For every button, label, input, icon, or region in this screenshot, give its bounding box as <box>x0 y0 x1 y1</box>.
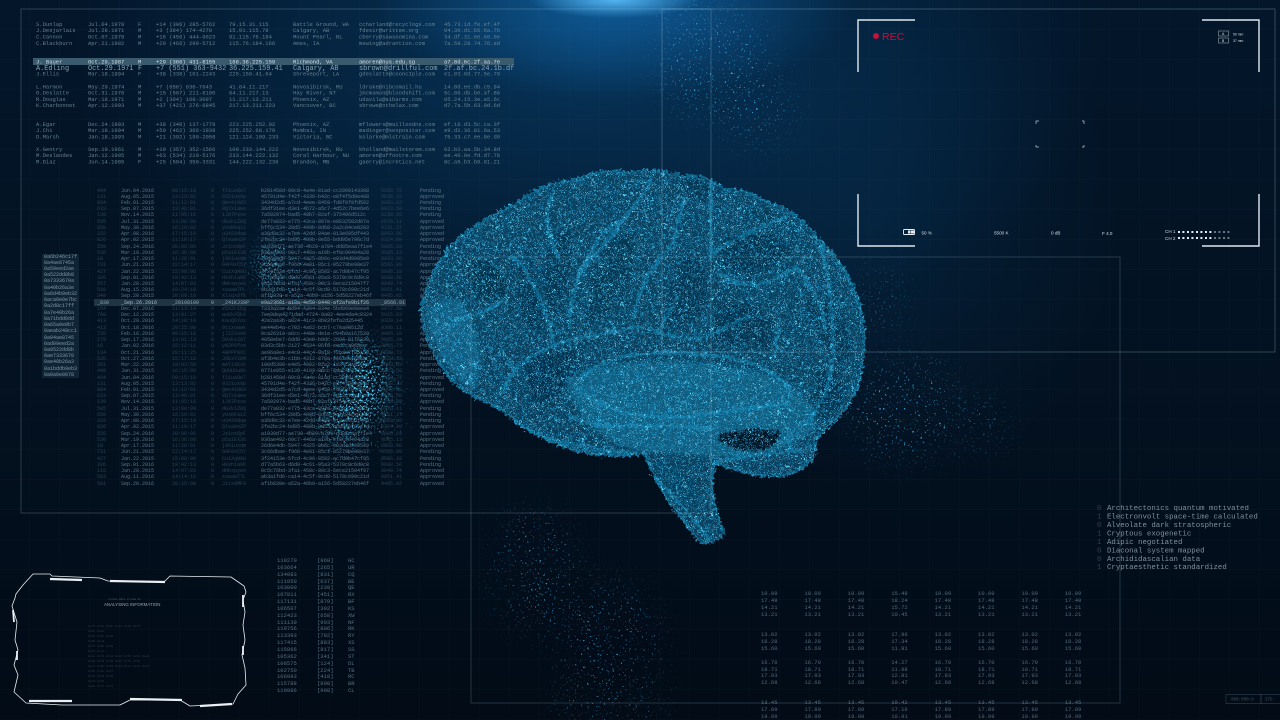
personnel data table: 223.225.252.02 <box>229 121 275 128</box>
numeric data grid: 10.09 10.09 10.09 15.48 10.09 10.09 10.09 10.09 <box>761 590 1081 597</box>
personnel data table: M.Deslandes <box>36 152 72 159</box>
personnel data table: 233.144.222.132 <box>229 152 279 159</box>
personnel data table: 2f.af.bc.24.1b.df <box>444 65 514 73</box>
viewfinder corners <box>858 20 1259 246</box>
personnel data table: M <box>138 27 141 34</box>
personnel data table: Mar.18.1971 <box>88 96 125 103</box>
numeric data grid: 13.02 13.02 13.02 17.96 13.02 13.02 13.02 13.02 <box>761 631 1081 638</box>
frame: lower panel <box>471 257 1120 703</box>
HUD faint data: 0x76 0xd0 0x25 <box>88 674 113 678</box>
personnel data table: Vancouver, BC <box>293 102 337 109</box>
personnel data table: 217.13.211.223 <box>229 102 275 109</box>
HUD small caption: system data stream 01 <box>108 597 141 601</box>
HUD faint data: 0xa7 0x5b 0x30 0x84 0xce 0x61 0x2f <box>88 664 149 668</box>
status list: Cryptaesthetic standardized <box>1107 564 1227 572</box>
dark cerebellum gap <box>717 429 780 451</box>
transaction table: index column: 494 131 884 633 139 505 858 332 826 550 530 18 731 427 326 557 510 349 _830 154 760 413 413 735 275 16 134 535 391 499 494 131 884 633 139 505 858 332 826 550 530 18 731 427 326 116 583 501 <box>97 188 109 487</box>
status list: 0 <box>1097 522 1101 530</box>
personnel data table: +7 (551) 363-9432 <box>156 65 226 73</box>
personnel data table: Sep.19.1961 <box>88 146 125 153</box>
personnel data table: +14 (396) 285-5762 <box>156 21 215 28</box>
personnel data table: O.Deslatte <box>36 90 69 97</box>
lens readout: B <box>1222 39 1225 43</box>
personnel data table: L.Harmon <box>36 84 62 91</box>
personnel data table: 7a.59.29.74.76.ad <box>444 40 500 47</box>
transaction table: uuid column: b281458d-00c8-4a4e-81ad-cc2060143308 45791d4e-f42f-4336-b42c-e8f4f5d9e408 3434d2d5-a7cd-4eee-8459-fd8f8f8fd502 36df31ee-d3e1-4b72-a5c7-4d52c7bee6e6 7a592974-bad5-48b7-82af-375406d512c de77a032-e775-43ca-897e-e8632502d07a bff6c534-28d5-499b-8d68-2a2c84ce8203 a36d0c32-e7ee-42dd-84ae-013e695df443 2fe2bc24-bd05-409b-8e55-bdd95e796c7d a1039d77-ae730-4b29-a784-dd85eaa7f1e4 936ae492-60c7-446a-a19b-ef8c90404a28 26d6e4db-5947-4325-8b6c-e03d4d9985e0 3c66dbae-f966-4e81-85c1-05279be98e37 3f24153e-5fcd-4c96-8502-ac7d0b47cf95 d77a5b63-d6d0-4c61-95a3-5370c9c6d0c8 0c5c76bd-3fa1-458c-80c3-6ece215047f7 ab3a1fd6-ca14-4c5f-9cd0-5178c699c21d af1b839-e-a52a-46b9-a156-5d58227eb46f e9a23681-a13a-4e50-8448-af2afe9b1f26 7333a2ae-8d94-4304-834e-5bd969e0eea4 7ee9dea42-1dad-4724-9a82-4ee4da4c8324 42e2aa3b-a824-41c3-8b83fefa2d25445 ee44eb4a-c702-4a62-bcb7-c7ea98512d 9ca26310-a6cc-448e-de1e-c94b9a167528 4058ebe7-6dd9-43e0-b0dc-2684-0176339 83d3c5bb-2127-4534-86f6-eed2ca965ee ae96a8e1-e4c8-44c4-9a18-f2bae7f85153 af3b4e3b-c1bb-4312-878a-9e61ee1c06a 100d5390-e4e5-4002-82a2-1e34c3a055ea 0771e055-e139-4103-86cc-8da2422f29 b281458d-00c8-4a4e-81ad-cc2060143308 45791d4e-f42f-4336-b42c-e8f4f5d9e408 3434d2d5-a7cd-4eee-8459-fd8f8f8fd502 36df31ee-d3e1-4b72-a5c7-4d52c7bee6e6 7a592974-bad5-48b7-82af-375406d512c de77a032-e775-43ca-897e-e8632502d07a bff6c534-28d5-499b-8d68-2a2c84ce8203 a36d0c32-e7ee-42dd-84ae-013e695df443 2fe2bc24-bd05-409b-8e55-bdd95e796c7d a1039d77-ae730-4b29-a784-dd85eaa7f1e4 936ae492-60c7-446a-a19b-ef8c90404a28 26d6e4db-5947-4325-8b6c-e03d4d9985e0 3c66dbae-f966-4e81-85c1-05279be98e37 3f24153e-5fcd-4c96-8502-ac7d0b47cf95 d77a5b63-d6d0-4c61-95a3-5370c9c6d0c8 0c5c76bd-3fa1-458c-80c3-6ece21504f97 ab3a1fd6-ca14-4c5f-9cd0-5178c699c21d af1b839e-a52a-46b9-a156-5d58227eb46f <box>261 188 372 487</box>
status list: Diaconal system mapped <box>1107 548 1205 556</box>
personnel data table: M <box>138 127 141 134</box>
personnel data table: +16 (456) 444-9623 <box>156 34 215 41</box>
personnel data table: kholland@mailstorem.com <box>359 146 436 153</box>
personnel data table: ldrake@nibcomail.hu <box>359 84 422 91</box>
personnel data table: Jan.18.1993 <box>88 134 124 141</box>
personnel data table: 36.225.159.41 <box>229 65 283 73</box>
highlight bar: transactions table <box>94 299 406 306</box>
personnel data table: kolarke@mlstrain.com <box>359 134 426 141</box>
transaction table: amount column: 9590.72 9638.33 9993.82 8923.50 6230.95 6976.11 9251.37 8863.80 6324.80 9905.03 9685.13 8893.00 8566.89 8886.18 8688.56 9849.74 9951.41 9495.02 _8566.91 8977.68 5915.83 8329.14 9306.11 9905.10 9905.34 9005.73 9590.72 9638.33 9993.82 8923.50 9590.72 9638.33 9993.82 8923.50 6230.95 6976.11 9251.37 8863.80 6324.80 9905.03 9685.13 8893.00 8566.89 8886.18 8688.56 9849.74 9951.41 9495.02 <box>381 188 405 487</box>
personnel data table: Shreveport, LA <box>293 71 340 78</box>
camera settings <box>922 229 1176 241</box>
lookup table: code column: GC UR CQ BE QE RX BF KS XW NF RK RY XS SS ST DL TB RC BR CL <box>348 557 355 694</box>
personnel data table: jmcmamon@bloodshift.com <box>359 90 436 97</box>
numeric data grid: 14.21 14.21 14.21 15.72 14.21 14.21 14.21 14.21 <box>761 604 1082 611</box>
HUD title: ANALYSING INFORMATION <box>104 602 160 607</box>
status list: Electronvolt space-time calculated <box>1107 514 1258 522</box>
HUD faint data: 0x90 0xa3 <box>88 640 104 643</box>
brain base volume <box>420 169 865 544</box>
personnel data table: F <box>138 71 141 78</box>
personnel data table: M <box>138 40 141 47</box>
personnel data table: Mar.18.1994 <box>88 127 125 134</box>
HUD faint data: 0x08 0xd4 0x39 0x6c 0xfa 0x12 <box>88 659 140 663</box>
personnel data table: M <box>138 134 141 141</box>
HUD faint data: 0x0a 0x6f 0xb1 <box>88 684 113 688</box>
hex code list: 0a6b246c17f 0a4ae8745a 0a59eed2ae 0a522dd8b8 0a7333670a 0a40b26a3e 0a6d4b0eb32 0aca0e0e7bc 0a2d8c17ff 0a7e40b26a 0a71bdd0dd 0a65a0e0b7 0aeab248cc1 0a94ae8745 0ad09eed2a 0a9522dd8b 0ae7333670 0ae40b26a3 0a1bddb0eb3 0a0a0e0078 <box>44 254 77 378</box>
personnel data table: 62.b2.aa.5b.34.8d <box>444 146 500 153</box>
personnel data table: 14.0d.ee.db.c5.94 <box>444 84 501 91</box>
personnel data table: Oct.29,1987 <box>88 59 124 66</box>
status list: 1 <box>1097 539 1102 547</box>
personnel data table: Novosibirsk, RU <box>293 84 343 91</box>
personnel data table: 144.222.132.236 <box>229 159 279 166</box>
personnel data table: 11.217.13.211 <box>229 96 273 103</box>
numeric data grid: 15.60 15.60 15.60 11.81 15.60 15.60 15.60 15.60 <box>761 645 1081 652</box>
camera settings: 50 % <box>922 230 932 236</box>
personnel data table: amoren@affootre.com <box>359 152 422 159</box>
personnel data table: a7.8d.6c.2f.aa.7e <box>444 59 500 66</box>
personnel data table: Apr.21.1982 <box>88 40 124 47</box>
personnel data table: 109.233.144.222 <box>229 146 279 153</box>
personnel data table: D.Marsh <box>36 134 59 141</box>
personnel data table: A.Egar <box>36 121 56 128</box>
personnel data table: R.Douglas <box>36 96 66 103</box>
lens readout: A <box>1222 32 1225 36</box>
personnel data table: Apr.12.1993 <box>88 102 124 109</box>
personnel data table: Phoenix, AZ <box>293 96 330 103</box>
personnel data table: ef.16.d3.5c.ca.3f <box>444 121 500 128</box>
status list: 0 <box>1097 505 1101 513</box>
personnel data table: M <box>138 34 141 41</box>
personnel data table: d7.7a.5b.63.0d.6d <box>444 102 500 109</box>
personnel data table: Hay River, NT <box>293 90 337 97</box>
brain and particle field <box>234 0 1032 720</box>
personnel data table: 05.24.15.3e.a5.6c <box>444 96 500 103</box>
numeric data grid: 17.93 17.93 17.93 12.81 17.93 17.93 17.93 17.93 <box>761 672 1081 679</box>
personnel data table: Mar.18.1994 <box>88 71 125 78</box>
personnel data table: Jul.28.1971 <box>88 27 125 34</box>
camera settings: CH 1 <box>1165 229 1176 234</box>
personnel data table: Jul.04.1978 <box>88 21 124 28</box>
lens readout <box>1218 31 1244 43</box>
numeric data grid: 13.21 13.21 13.21 10.45 13.21 13.21 13.21 13.21 <box>761 611 1082 618</box>
HUD faint data: 0x5d 0x0e 0x22 <box>88 634 113 638</box>
personnel data table: Ames, IA <box>293 40 320 47</box>
personnel data table: Coral Harbour, NU <box>293 152 349 159</box>
personnel data table: 64.11.217.13 <box>229 90 269 97</box>
camera settings: F 4.0 <box>1102 231 1113 236</box>
lens readout: 37 mm <box>1233 39 1244 43</box>
numeric data grid: 17.48 17.48 17.48 18.24 17.48 17.48 17.48 17.48 <box>761 597 1081 604</box>
personnel data table: Calgary, AB <box>293 65 338 73</box>
personnel data table: e1.03.0d.77.5e.79 <box>444 71 500 78</box>
personnel data table: C.Cannon <box>36 34 62 41</box>
record indicator: REC <box>882 31 905 43</box>
personnel data table: Jan.12.1995 <box>88 152 124 159</box>
bottom-right timecode box: STD <box>1265 698 1273 702</box>
personnel data table: 5c.86.db.be.af.86 <box>444 90 500 97</box>
status list: 1 <box>1097 530 1102 538</box>
personnel data table: 79.15.31.115 <box>229 21 269 28</box>
personnel data table: 91.115.76.184 <box>229 34 273 41</box>
personnel data table: mflowers@mailloodns.com <box>359 121 436 128</box>
lens readout: 50 mm <box>1233 32 1244 36</box>
personnel data table: 166.36.225.159 <box>229 59 275 66</box>
personnel data table: M.Diaz <box>36 159 56 166</box>
bottom-right timecode box: 000:000:9 <box>1231 698 1254 702</box>
battery icon <box>904 230 914 234</box>
personnel data table: M <box>138 96 141 103</box>
focus ticks <box>1036 121 1084 147</box>
personnel data table: J.Desjarlais <box>36 27 76 34</box>
HUD frame outline <box>12 574 246 706</box>
personnel data table: F <box>138 65 142 73</box>
personnel data table: +38 (338) 101-2243 <box>156 71 215 78</box>
personnel data table: 41.64.11.217 <box>229 84 269 91</box>
personnel data table: 34.df.31.ee.60.0e <box>444 34 500 41</box>
personnel data table: May.29.1974 <box>88 84 125 91</box>
status list: 0 <box>1097 556 1101 564</box>
personnel data table: Victoria, BC <box>293 134 333 141</box>
personnel data table: M <box>138 90 141 97</box>
personnel data table: 15.91.115.78 <box>229 27 269 34</box>
personnel data table: J. Bauer <box>36 59 62 66</box>
camera settings: CH 2 <box>1165 236 1176 241</box>
HUD faint data: 0x1b 0x9e 0x47 <box>88 669 113 673</box>
personnel data table: 115.76.184.166 <box>229 40 275 47</box>
personnel data table: F <box>138 21 141 28</box>
status list: 0 <box>1097 548 1101 556</box>
personnel data table: 75.33.c7.ee.8e.d0 <box>444 134 500 141</box>
transaction table: flag column: 0 0 0 0 0 0 0 0 0 0 0 0 0 0 0 0 0 0 0 0 0 0 0 0 0 0 0 0 0 0 0 0 0 0 0 0 0 0 0 0 0 0 0 0 0 0 0 0 <box>211 188 214 487</box>
personnel data table: +38 (340) 137-1779 <box>156 121 215 128</box>
personnel data table: Brandon, MB <box>293 159 330 166</box>
personnel data table: Calgary, AB <box>293 27 330 34</box>
personnel data table: Oct.07.1978 <box>88 34 124 41</box>
HUD faint data: 0xc3 0x58 <box>88 680 104 683</box>
personnel data table: udavila@aibarms.com <box>359 96 422 103</box>
personnel data table: Oct.29.1971 <box>88 65 134 73</box>
camera settings: 5500 K <box>994 230 1009 236</box>
personnel data table: 8c.a5.b3.b0.91.21 <box>444 159 501 166</box>
personnel data table: J.Ellis <box>36 71 59 78</box>
personnel data table: ccharland@recyclogs.com <box>359 21 436 28</box>
personnel data table: +25 (504) 350-3331 <box>156 159 216 166</box>
personnel data table: Phoenix, AZ <box>293 121 330 128</box>
bottom-right timecode box <box>1226 694 1280 704</box>
personnel data table: Oct.31.1976 <box>88 90 124 97</box>
numeric data grid: 18.28 18.28 18.28 17.34 18.28 18.28 18.28 18.28 <box>761 638 1081 645</box>
personnel data table: +63 (534) 210-5176 <box>156 152 215 159</box>
personnel data table: 121.124.109.233 <box>229 134 279 141</box>
personnel data table: 45.73.1d.fe.ef.4f <box>444 21 500 28</box>
personnel data table: +2 (394) 168-3097 <box>156 96 212 103</box>
personnel data table: K.Charbonnet <box>36 102 76 109</box>
personnel data table: +7 (656) 636-7643 <box>156 84 212 91</box>
personnel data table: F <box>138 159 141 166</box>
highlight bar: personnel table <box>33 58 514 65</box>
personnel data table: +15 (507) 211-8100 <box>156 90 215 97</box>
personnel data table: +20 (466) 299-5712 <box>156 40 215 47</box>
status list: Cryptous exogenetic <box>1107 530 1191 538</box>
status list: 1 <box>1097 514 1102 522</box>
personnel data table: Mumbai, IN <box>293 127 326 134</box>
personnel data table: ee.46.0e.fd.d7.78 <box>444 152 500 159</box>
personnel data table: +19 (357) 352-1566 <box>156 146 215 153</box>
personnel data table: M <box>138 121 141 128</box>
HUD faint data: 0x1f 0x2a 0x9b 0x44 0x10 0x77 <box>88 624 140 628</box>
personnel data table: 225.159.41.64 <box>229 71 273 78</box>
personnel data table: sbrowe@othelax.com <box>359 102 419 109</box>
frame: left panel <box>21 9 711 513</box>
personnel data table: sbrown@drillful.com <box>359 65 438 73</box>
transaction table: time column: 09:15:18 13:13:02 11:12:01 13:46:01 11:05:16 13:00:09 16:19:02 17:15:19 11:10:17 20:06:06 16:36:08 11:28:01 12:14:17 15:08:06 19:42:13 14:07:03 19:24:18 20:09:16 _20108100 11:13:14 13:01:27 14:18:10 20:25:00 09:15:18 13:01:13 15:12:11 20:11:25 15:17:18 18:03:59 16:15:09 09:15:18 13:13:02 11:12:01 13:46:01 11:05:16 13:00:09 16:19:02 17:15:19 11:10:17 20:06:06 16:36:08 11:28:01 12:14:17 15:08:06 19:42:13 14:07:03 14:14:16 20:15:08 <box>172 188 199 487</box>
personnel data table: Novosibirsk, RU <box>293 146 343 153</box>
personnel data table: Battle Ground, WA <box>293 21 350 28</box>
frame: upper right panel <box>662 9 1275 352</box>
personnel data table: fdesir@writtee.org <box>359 27 418 34</box>
personnel data table: +29 (360) 431-8155 <box>156 59 215 66</box>
personnel data table: cberry@sawsoomina.com <box>359 34 429 41</box>
brain ridges <box>420 169 865 544</box>
HUD faint data <box>88 624 149 688</box>
HUD faint data: 0x4f 0xc2 <box>88 649 104 653</box>
personnel data table: +37 (421) 276-6845 <box>156 102 215 109</box>
personnel data table: Dec.24.1993 <box>88 121 124 128</box>
numeric data grid: 13.45 13.45 13.45 10.42 13.45 13.45 13.45 13.45 <box>761 699 1081 706</box>
personnel data table: +3 (384) 174-4270 <box>156 27 212 34</box>
personnel data table: 225.252.68.179 <box>229 127 275 134</box>
status list: Alveolate dark stratospheric <box>1107 522 1231 530</box>
personnel data table: M <box>138 146 141 153</box>
HUD faint data: 0x17 0x6b 0x3a <box>88 644 113 648</box>
numeric data grid: 17.89 17.89 17.89 17.16 17.89 17.89 17.89 17.89 <box>761 706 1081 713</box>
status list: Archididascalian data <box>1107 556 1201 564</box>
personnel data table: amoren@nus.edu.sg <box>359 59 415 66</box>
HUD faint data: 0x3c 0x81 <box>88 630 104 633</box>
lookup table: bracket column: [968] [265] [831] [637] [239] [451] [870] [392] [658] [903] [806] [702] [883] [817] [341] [124] [224] [410] [800] [998] <box>317 557 334 694</box>
status list: 1 <box>1097 564 1102 572</box>
audio meters <box>1178 231 1229 239</box>
personnel data table: M <box>138 84 141 91</box>
personnel data table: mewing@adrantion.com <box>359 40 426 47</box>
numeric data grid: 16.70 16.70 16.70 14.27 16.70 16.70 16.70 16.70 <box>761 659 1081 666</box>
status list: Architectonics quantum motivated <box>1107 505 1249 513</box>
camera settings: 0 dB <box>1051 230 1060 236</box>
personnel data table: gdeslatte@cooncIple.com <box>359 71 436 78</box>
personnel data table: e9.d2.36.81.6a.53 <box>444 127 500 134</box>
personnel data table: 04.36.d1.b5.ba.7b <box>444 27 500 34</box>
personnel data table: +21 (392) 190-2058 <box>156 134 215 141</box>
personnel data table: S.Dunlap <box>36 21 62 28</box>
personnel data table: +59 (462) 366-1939 <box>156 127 215 134</box>
personnel data table: madinger@sexpositer.com <box>359 127 436 134</box>
personnel data table: Mount Pearl, NL <box>293 34 343 41</box>
personnel data table: M <box>138 59 141 66</box>
transaction table: code column: f21ua8e7 9321ux9p Qmx41083 8Q7x1aee iJ97Psxe dGxk1Z8Q yUsKkai2 u3429dqw Qlsa8nZP Jz1ox6pF p5a1EX36 j961uxqm G9F0xC5Y Cu1XqH9U HXsh1a9D dHkxpyeo xaaaw7PL Xlxqx6fk _241KJ30P z5X2c1kg woEkX5kX kAuQ6Yux 9t1xowwk j7Z23xAN D0xks287 yW2P0fxe 4WPPP9XC J9ExY1GM mAT1Xkxk QUUUSuGh f21ua8e7 9321ux9p Qmx41083 8Q7x1aee iJ97Psxe dGxk1Z8Q yUsKkai2 u3429dqw Qlsa8nZP Jz1ox6pF p5a1EX36 j961uxqm G9F0xC5Y Cu1XqH9U HXsh1a9D dHkxpyeo xaaaw77L J1tx8MF9 <box>222 188 249 487</box>
personnel data table: M <box>138 102 141 109</box>
personnel data table: Richmond, VA <box>293 59 333 66</box>
numeric data grid: 12.68 12.68 12.68 10.47 12.68 12.68 12.68 12.68 <box>761 679 1081 686</box>
personnel data table: gaerry@incretics.net <box>359 159 425 166</box>
numeric data grid: 19.99 19.99 19.99 10.91 19.99 19.99 19.99 19.99 <box>761 713 1081 720</box>
status list: Adipic negotiated <box>1107 539 1182 547</box>
personnel data table: X.Gentry <box>36 146 63 153</box>
personnel data table: Jun.14.1985 <box>88 159 124 166</box>
transaction table: date column: Jun.04.2016 Aug.05.2015 Feb.01.2015 Sep.07.2015 Nov.14.2015 Jul.31.2015 May.30.2016 Apr.08.2016 Apr.02.2015 Sep.24.2016 Mar.19.2016 Apr.17.2015 Jun.21.2015 Jan.22.2015 Sep.01.2016 Jan.28.2015 Aug.15.2016 Sep.20.2015 _Sep.26.2016 Dec.07.2016 Dec.12.2015 Oct.29.2016 Oct.18.2016 Feb.16.2016 Sep.17.2016 Jan.02.2016 Oct.21.2016 Oct.27.2016 Mar.22.2016 Jan.31.2015 Jun.04.2016 Aug.05.2015 Feb.01.2015 Sep.07.2015 Nov.14.2015 Jul.31.2015 May.30.2016 Apr.08.2016 Apr.02.2015 Sep.24.2016 Mar.19.2016 Apr.17.2015 Jun.21.2015 Jan.22.2015 Sep.01.2016 Jan.28.2015 Aug.11.2016 Sep.20.2016 <box>121 188 157 487</box>
brain <box>418 168 867 545</box>
personnel data table: M <box>138 152 141 159</box>
personnel data table: J.Chi <box>36 127 53 134</box>
personnel data table: C.Blackburn <box>36 40 72 47</box>
transaction table: status column: Pending Approved Pending Pending Pending Approved Approved Approved Approved Pending Pending Pending Approved Approved Approved Approved Approved Approved Approved Approved Approved Approved Approved Approved Approved Pending Approved Pending Approved Pending Approved Pending Approved Pending Approved Pending Pending Pending Approved Approved Approved Approved Pending Pending Pending Approved Approved Approved <box>420 188 444 487</box>
numeric data grid: 18.71 18.71 18.71 11.98 18.71 18.71 18.71 18.71 <box>761 666 1082 673</box>
lookup table: id column: 119270 103664 134083 111950 103000 107811 117131 106507 112423 111139 119756 113393 117415 115866 105362 108575 102750 106993 115788 119986 <box>277 557 297 694</box>
personnel data table: A.Edling <box>36 65 69 73</box>
HUD faint data: 0x2e 0x71 0x1d 0x93 0x50 0xb6 0xe0 <box>88 654 149 658</box>
